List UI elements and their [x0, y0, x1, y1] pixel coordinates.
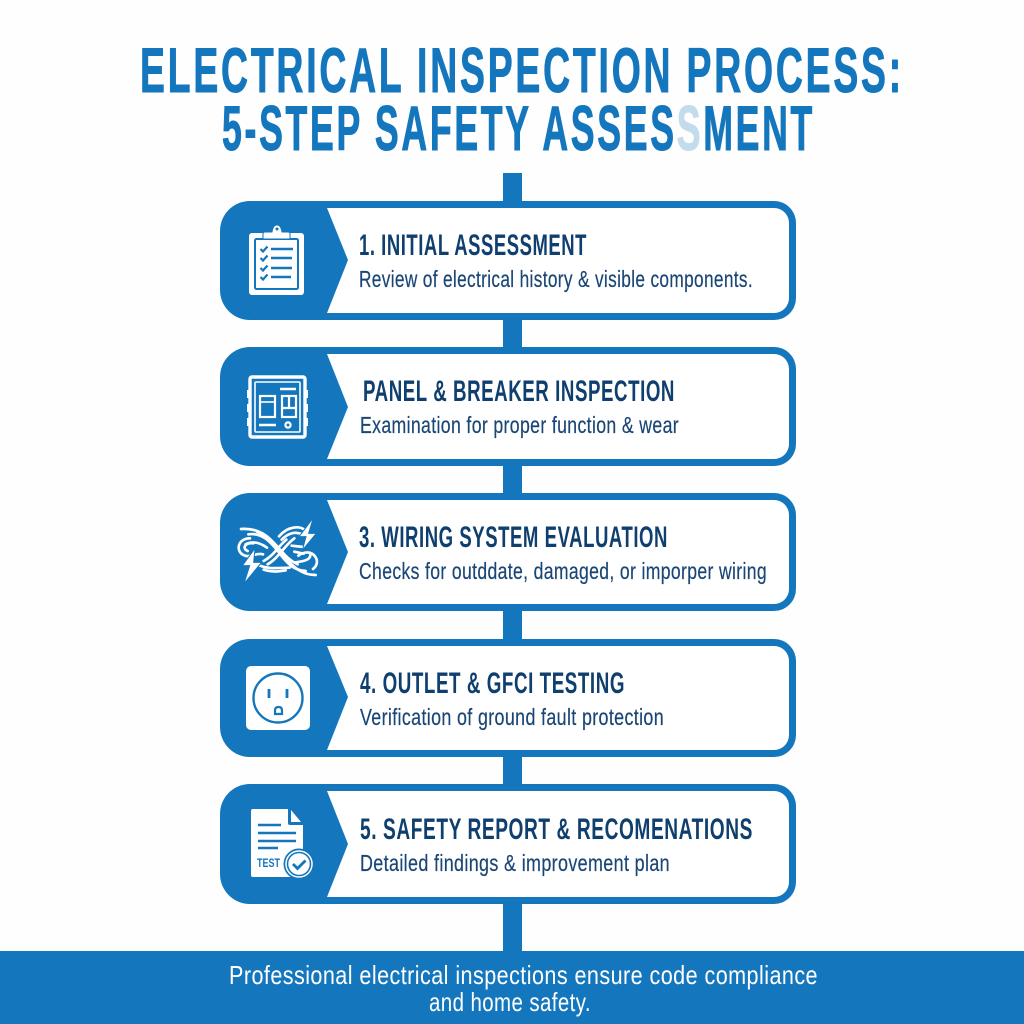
heading: step 5: 5. SAFETY REPORT & RECOMENATIONS	[360, 813, 753, 846]
footer banner: Professional electrical inspections ensure code compliance	[229, 960, 818, 990]
icon: breaker panel	[248, 377, 306, 437]
heading: step 4: 4. OUTLET & GFCI TESTING	[360, 667, 625, 700]
description: step 2: Examination for proper function & wear	[360, 412, 679, 438]
heading: step 2: PANEL & BREAKER INSPECTION	[363, 375, 675, 408]
icon: test report document	[251, 809, 314, 880]
footer banner	[0, 951, 1024, 1024]
description: step 1: Review of electrical history & visible components.	[359, 266, 753, 292]
description: step 5: Detailed findings & improvement plan	[360, 850, 670, 876]
title: 5-STEP SAFETY ASSESSMENT	[222, 94, 815, 164]
icon: tangled wires with lightning	[239, 518, 317, 584]
title	[140, 36, 904, 164]
vertical connector spine	[503, 173, 522, 953]
icon: clipboard checklist	[249, 225, 304, 295]
panel: step 1	[220, 201, 796, 320]
heading: step 1: 1. INITIAL ASSESSMENT	[359, 229, 587, 262]
icon: outlet	[246, 666, 310, 730]
panel: step 4	[220, 639, 796, 757]
footer banner: and home safety.	[429, 987, 591, 1017]
icon: test report document: TEST	[257, 856, 280, 870]
heading: step 3: 3. WIRING SYSTEM EVALUATION	[359, 521, 668, 554]
description: step 4: Verification of ground fault protection	[360, 704, 664, 730]
panel: step 2	[220, 347, 796, 466]
panel: step 3	[220, 493, 796, 611]
description: step 3: Checks for outddate, damaged, or imporper wiring	[359, 558, 767, 584]
panel: step 5	[220, 784, 796, 904]
